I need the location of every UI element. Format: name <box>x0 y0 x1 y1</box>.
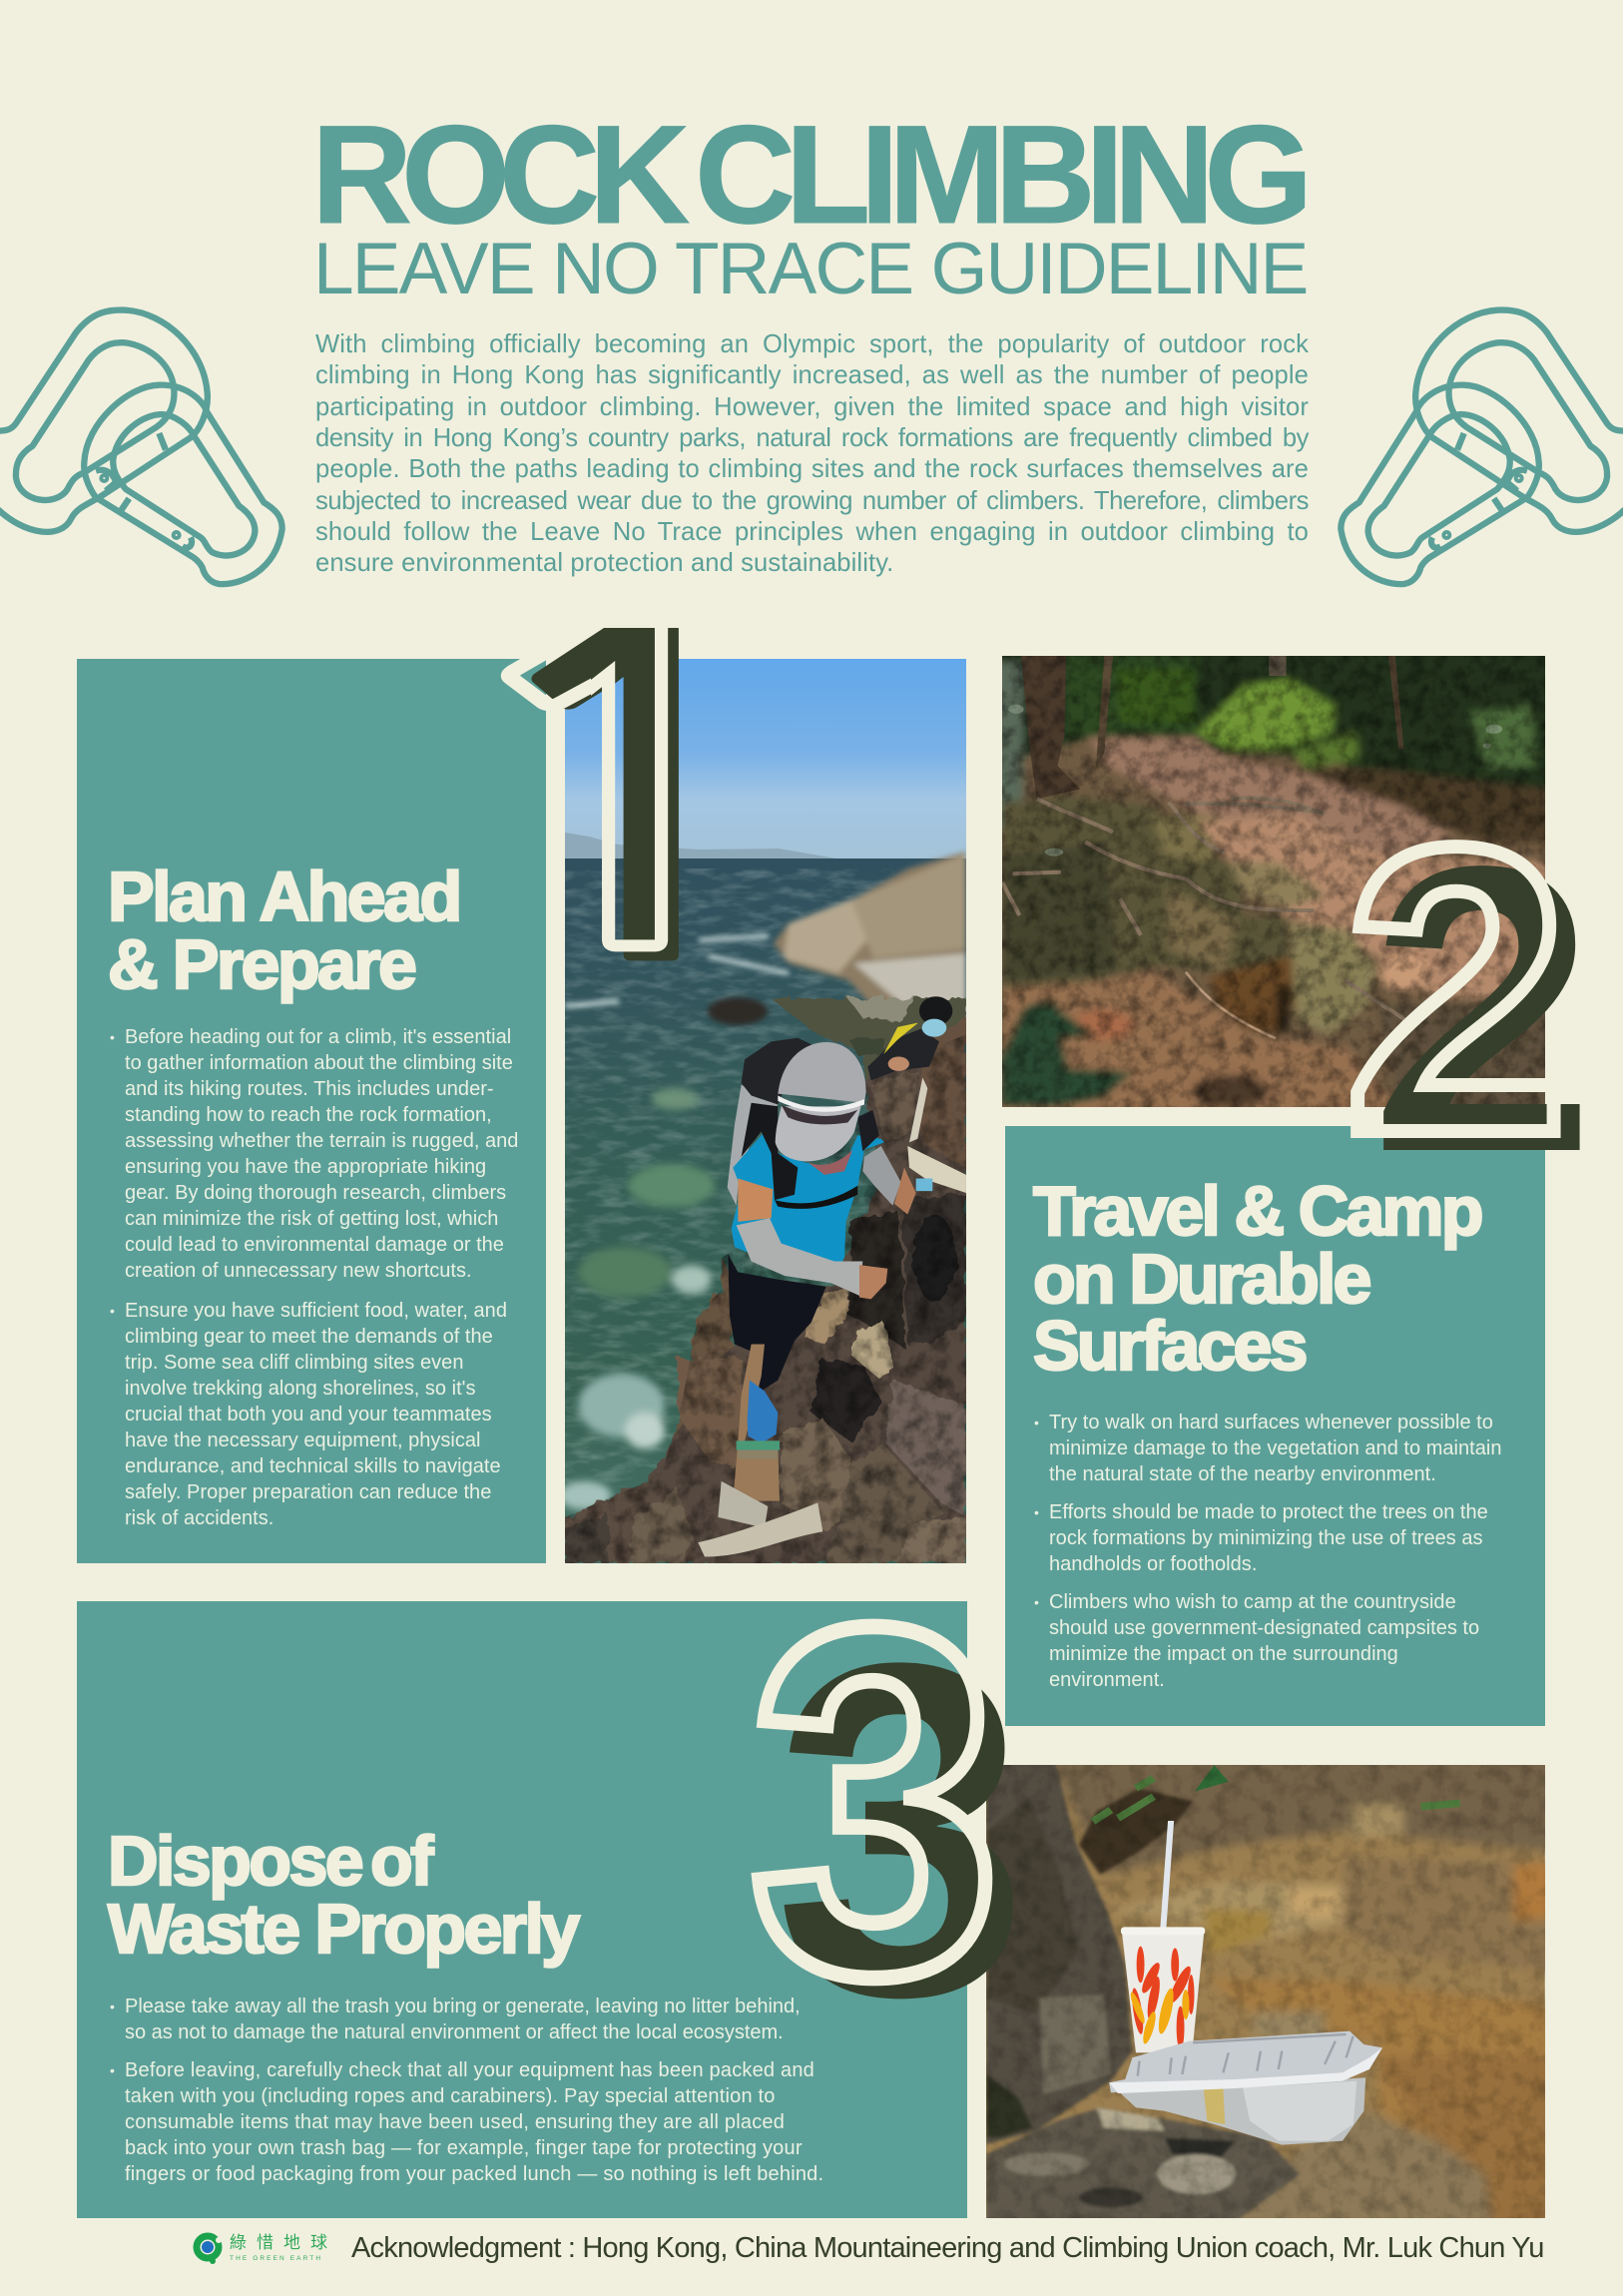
heading: dispose of waste <box>106 1822 582 1969</box>
text: plan ahead first point: to gather information about the climbing site <box>125 1052 513 1074</box>
text: plan ahead second point: have the necessary equipment, physical <box>125 1430 481 1451</box>
heading: dispose of waste: Dispose of <box>108 1822 431 1900</box>
title <box>311 96 1306 253</box>
text: waste first point <box>110 1996 801 2043</box>
text: plan ahead second point <box>110 1300 507 1529</box>
text: travel first point: Try to walk on hard surfaces whenever possible to <box>1049 1412 1493 1434</box>
panel: dispose of waste properly <box>77 1601 967 2218</box>
heading: travel and camp: on Durable <box>1033 1240 1369 1318</box>
text: waste first point: so as not to damage the natural environment or affect the local ecosystem. <box>125 2021 784 2043</box>
acknowledgment: Acknowledgment : Hong Kong, China Mountaineering and Climbing Union coach, Mr. Luk Chun Yu <box>351 2232 1544 2264</box>
food container <box>1109 2031 1382 2145</box>
number 2: 2 <box>1344 764 1570 1218</box>
intro paragraph: subjected to increased wear due to the growing number of climbers. Therefore, climbers <box>315 487 1309 515</box>
text: waste second point: back into your own trash bag — for example, finger tape for protecting your <box>125 2137 803 2159</box>
text: plan ahead first point: gear. By doing thorough research, climbers <box>125 1182 506 1204</box>
text: travel third point: environment. <box>1049 1669 1165 1691</box>
text: travel second point: Efforts should be made to protect the trees on the <box>1049 1501 1488 1523</box>
logo wordmark <box>230 2233 337 2262</box>
text: plan ahead second point: risk of accidents. <box>125 1507 273 1529</box>
panel: dispose of waste properly: • <box>110 2062 115 2078</box>
heading: plan ahead: & Prepare <box>108 925 414 1003</box>
main climber <box>698 1038 966 1557</box>
panel: travel and camp on durable surfaces <box>1005 1126 1545 1726</box>
text: plan ahead first point <box>110 1026 518 1282</box>
intro paragraph <box>315 330 1310 577</box>
text: plan ahead first point: standing how to reach the rock formation, <box>125 1104 492 1126</box>
text: waste second point: consumable items that may have been used, ensuring they are all placed <box>125 2111 785 2133</box>
number 1: 1 <box>483 565 796 1029</box>
text: waste second point: taken with you (including ropes and carabiners). Pay special attention to <box>125 2085 776 2107</box>
intro paragraph: With climbing officially becoming an Olympic sport, the popularity of outdoor rock <box>315 330 1309 358</box>
number 1: 1 <box>447 565 845 1030</box>
text: travel third point: minimize the impact on the surrounding <box>1049 1643 1398 1665</box>
number 3: 3 <box>774 1565 1029 2095</box>
text: travel first point: the natural state of the nearby environment. <box>1049 1463 1436 1485</box>
number 2: 2 <box>1369 783 1596 1237</box>
text: waste second point <box>110 2059 823 2185</box>
second climber <box>867 996 952 1080</box>
number 1: 1 <box>418 567 853 1011</box>
panel: travel and camp on durable surfaces: • <box>1034 1594 1039 1610</box>
logo mark <box>194 2232 222 2264</box>
panel: dispose of waste properly: • <box>110 1999 115 2014</box>
text: plan ahead first point: ensuring you have the appropriate hiking <box>125 1156 486 1178</box>
title: ROCK <box>311 96 679 253</box>
heading: plan ahead: Plan Ahead <box>108 858 460 935</box>
text: plan ahead first point: Before heading out for a climb, it's essential <box>125 1026 511 1048</box>
logo wordmark: 綠惜地球 <box>230 2233 337 2252</box>
logo wordmark: THE GREEN EARTH <box>230 2255 322 2262</box>
intro paragraph: climbing in Hong Kong has significantly increased, as well as the number of people <box>315 361 1309 389</box>
text: plan ahead second point: involve trekking along shorelines, so it's <box>125 1378 476 1400</box>
text: plan ahead second point: climbing gear to meet the demands of the <box>125 1326 493 1348</box>
panel: plan ahead and prepare: • <box>110 1029 115 1045</box>
heading: travel and camp: Surfaces <box>1033 1307 1306 1385</box>
text: waste second point: Before leaving, carefully check that all your equipment has been packed and <box>125 2059 814 2081</box>
intro paragraph: participating in outdoor climbing. However, given the limited space and high visitor <box>315 393 1309 421</box>
logo: the green earth <box>194 2232 337 2264</box>
heading: plan ahead <box>108 858 460 1004</box>
text: travel second point <box>1034 1501 1488 1575</box>
text: plan ahead second point: Ensure you have sufficient food, water, and <box>125 1300 507 1322</box>
text: travel third point: Climbers who wish to camp at the countryside <box>1049 1591 1456 1613</box>
text: plan ahead second point: safely. Proper preparation can reduce the <box>125 1481 491 1503</box>
heading: dispose of waste: Waste Properly <box>108 1890 578 1968</box>
text: plan ahead first point: and its hiking routes. This includes under- <box>125 1078 494 1100</box>
number 1 <box>501 628 1580 1999</box>
text: travel second point: handholds or footholds. <box>1049 1553 1257 1575</box>
straw <box>1160 1821 1174 1930</box>
intro paragraph: should follow the Leave No Trace principles when engaging in outdoor climbing to <box>315 518 1309 546</box>
text: travel first point <box>1034 1412 1501 1485</box>
cup <box>1121 1927 1205 2052</box>
intro paragraph: density in Hong Kong’s country parks, natural rock formations are frequently climbed by <box>315 424 1309 452</box>
intro paragraph: people. Both the paths leading to climbing sites and the rock surfaces themselves are <box>315 455 1309 483</box>
text: waste first point: Please take away all the trash you bring or generate, leaving no litter behind, <box>125 1996 801 2017</box>
photo: climbers on a sea cliff <box>565 659 966 1563</box>
number 3: 3 <box>749 1525 1002 2078</box>
heading: travel and camp: Travel & Camp <box>1033 1172 1481 1250</box>
text: plan ahead first point: can minimize the risk of getting lost, which <box>125 1208 498 1230</box>
text: plan ahead first point: assessing whether the terrain is rugged, and <box>125 1130 518 1152</box>
icon: carabiners right <box>1338 306 1623 587</box>
text: travel first point: minimize damage to the vegetation and to maintain <box>1049 1437 1501 1459</box>
text: travel second point: rock formations by minimizing the use of trees as <box>1049 1527 1483 1549</box>
title: CLIMBING <box>695 96 1303 253</box>
text: plan ahead second point: trip. Some sea cliff climbing sites even <box>125 1352 463 1374</box>
text: plan ahead second point: endurance, and technical skills to navigate <box>125 1455 501 1477</box>
text: waste second point: fingers or food packaging from your packed lunch — so nothing is left behind. <box>125 2163 823 2185</box>
icon: carabiners left <box>0 306 285 587</box>
photo: eroded trail with exposed roots <box>1002 656 1545 1107</box>
heading: travel and camp <box>1032 1172 1482 1385</box>
text: plan ahead first point: could lead to environmental damage or the <box>125 1234 504 1256</box>
text: travel third point: should use government-designated campsites to <box>1049 1617 1479 1639</box>
number 1: 1 <box>474 567 774 1012</box>
panel: travel and camp on durable surfaces: • <box>1034 1504 1039 1520</box>
text: plan ahead second point: crucial that both you and your teammates <box>125 1404 492 1426</box>
photo: litter beside a tree <box>986 1765 1545 2218</box>
text: travel third point <box>1034 1591 1479 1691</box>
panel: plan ahead and prepare: • <box>110 1303 115 1319</box>
text: plan ahead first point: creation of unnecessary new shortcuts. <box>125 1260 472 1282</box>
panel: plan ahead and prepare <box>77 659 546 1563</box>
panel: travel and camp on durable surfaces: • <box>1034 1415 1039 1431</box>
lower cliff and climbers, drawn in cropped coordinates <box>558 996 966 1563</box>
subtitle: LEAVE NO TRACE GUIDELINE <box>313 229 1307 309</box>
intro paragraph: ensure environmental protection and sustainability. <box>315 549 893 577</box>
